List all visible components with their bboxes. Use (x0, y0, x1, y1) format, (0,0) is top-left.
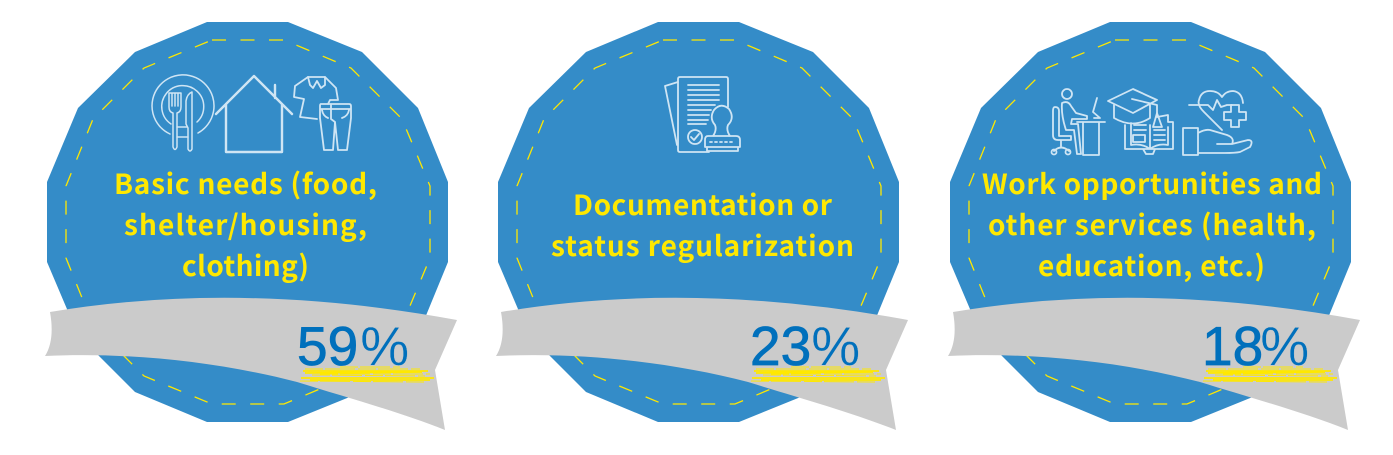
polygon badge background (47, 22, 448, 422)
ribbon (496, 298, 908, 430)
label text (982, 163, 1322, 285)
label text: status regularization (551, 225, 854, 265)
yellow scribble underline (300, 367, 434, 382)
icon: person at desk (1052, 89, 1105, 155)
polygon badge background (950, 22, 1351, 422)
label text: other services (health, (988, 204, 1316, 244)
icon: shirt and trousers (294, 77, 351, 150)
label text (551, 184, 854, 265)
icon: house (216, 76, 292, 152)
dashed stitching (969, 40, 1333, 404)
percentage 23%: 23% (750, 315, 860, 377)
ribbon (948, 298, 1360, 430)
dashed stitching (66, 40, 430, 404)
percentage 18%: 18% (1202, 315, 1309, 377)
icon: document with stamp (665, 77, 740, 152)
polygon badge background (498, 22, 899, 422)
icon: heart in caring hand (1183, 91, 1252, 155)
label text (114, 163, 377, 285)
dashed stitching (517, 40, 881, 404)
yellow scribble underline (751, 367, 885, 382)
label text: Documentation or (573, 184, 833, 224)
icon: plate and cutlery (152, 75, 214, 151)
label text: Basic needs (food, (114, 163, 377, 203)
label text: clothing) (182, 245, 309, 285)
yellow scribble underline (1203, 367, 1337, 382)
label text: Work opportunities and (982, 163, 1322, 203)
badge: basic needs 59% (45, 22, 457, 430)
percentage 59%: 59% (297, 315, 409, 377)
ribbon (45, 298, 457, 430)
label text: shelter/housing, (124, 204, 367, 244)
badge: documentation 23% (496, 22, 908, 430)
badge: work and other services 18% (948, 22, 1360, 430)
label text: education, etc.) (1038, 245, 1265, 285)
icon: graduation cap and book (1108, 89, 1173, 154)
